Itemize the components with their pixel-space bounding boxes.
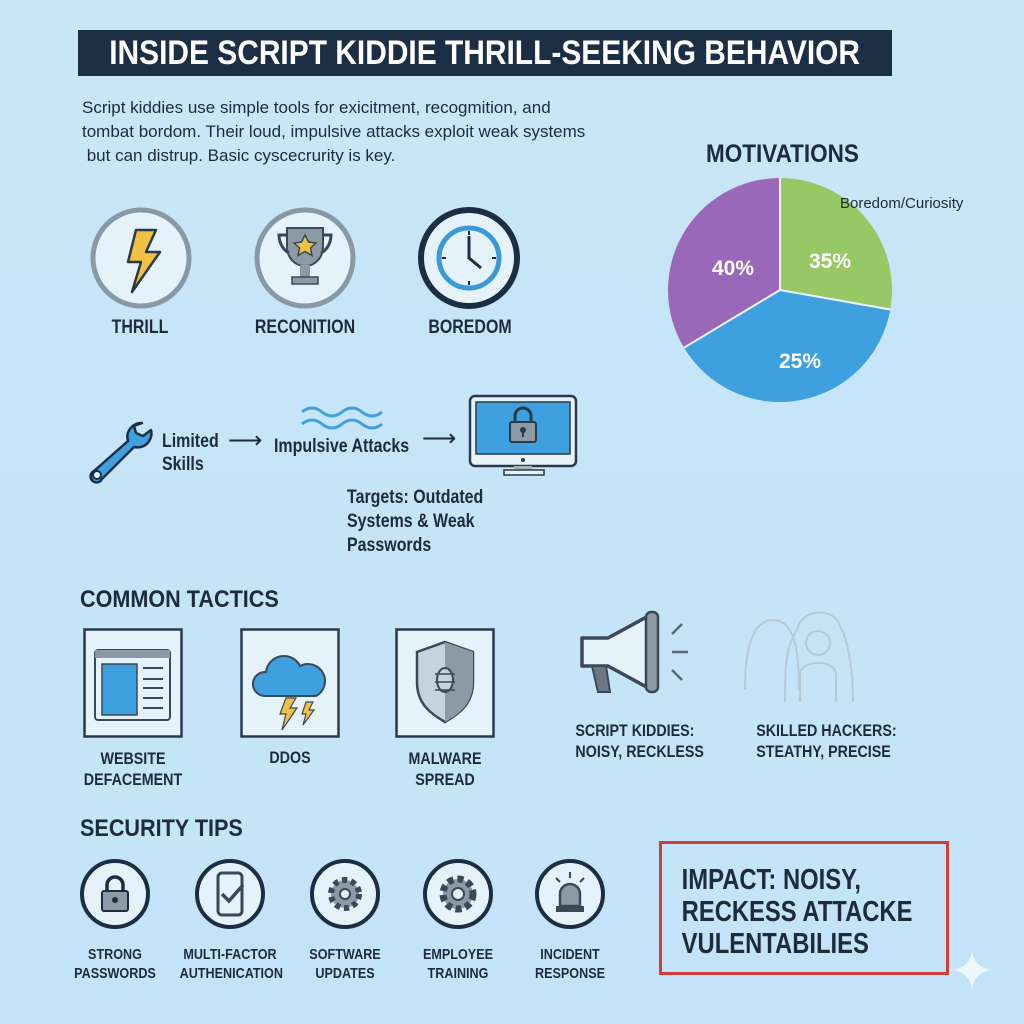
icon: hooded hackers: [744, 612, 854, 702]
label: malware: MALWARE: [408, 749, 481, 768]
intro text: but can distrup. Basic cyscecrurity is key.: [87, 146, 395, 165]
label: skilled hackers: SKILLED HACKERS:: [756, 721, 897, 740]
arrow: ⟶: [228, 427, 262, 454]
icon: software gear: [310, 859, 380, 929]
icon: wrench: [89, 422, 153, 484]
security tips icons: UPDATES: [315, 965, 375, 982]
tactics panels: [83, 628, 495, 789]
security tips icons: RESPONSE: [535, 965, 605, 982]
callout: impact: RECKESS ATTACKE: [682, 896, 912, 928]
text: targets: Passwords: [347, 535, 431, 556]
callout: impact: VULENTABILIES: [682, 928, 869, 960]
panel: defacement: [83, 628, 183, 738]
label: malware: [408, 749, 481, 789]
security tips icons: MULTI-FACTOR: [183, 946, 277, 963]
label: skilled hackers: STEATHY, PRECISE: [756, 742, 891, 761]
text: targets: Targets: Outdated: [347, 487, 483, 508]
security tips heading: SECURITY TIPS: [80, 815, 243, 842]
label: boredom: BOREDOM: [428, 317, 512, 338]
icon: megaphone: [580, 610, 688, 694]
icon: monitor lock: [468, 394, 578, 476]
pie chart: 25%: [779, 350, 821, 373]
title: INSIDE SCRIPT KIDDIE THRILL-SEEKING BEHAVIOR: [110, 34, 860, 72]
pie chart: 40%: [712, 257, 754, 280]
text: impulsive attacks: Impulsive Attacks: [274, 436, 409, 457]
icon: lock: [80, 859, 150, 929]
label: script kiddies: NOISY, RECKLESS: [575, 742, 704, 761]
pie chart: [668, 178, 964, 402]
label: skilled hackers: [756, 721, 897, 761]
motivations heading: MOTIVATIONS: [706, 140, 859, 168]
label: defacement: DEFACEMENT: [84, 770, 182, 789]
icon: thrill: [90, 208, 192, 308]
icon: mfa phone: [195, 859, 265, 929]
icon: trophy: [254, 208, 356, 308]
labels: [74, 946, 156, 982]
icon: training gear: [423, 859, 493, 929]
intro text: [82, 98, 585, 165]
label: defacement: WEBSITE: [100, 749, 166, 768]
label: defacement: [84, 749, 182, 789]
intro text: tombat bordom. Their loud, impulsive attacks exploit weak systems: [82, 122, 585, 141]
icon: sparkle: [952, 950, 992, 990]
security tips icons: SOFTWARE: [309, 946, 381, 963]
text: limited skills: [162, 431, 219, 475]
label: ddos: DDOS: [269, 748, 311, 767]
text: targets: [347, 487, 483, 556]
security tips icons: TRAINING: [428, 965, 488, 982]
callout: impact: IMPACT: NOISY,: [682, 864, 861, 896]
text: targets: Systems & Weak: [347, 511, 474, 532]
intro text: Script kiddies use simple tools for exicitment, recogmition, and: [82, 98, 551, 117]
icon: clock: [418, 207, 520, 309]
label: reconition: RECONITION: [255, 317, 355, 338]
security tips icons: [74, 859, 605, 982]
flow: limited skills to attacks: [89, 394, 578, 556]
security tips icons: EMPLOYEE: [423, 946, 493, 963]
labels: PASSWORDS: [74, 965, 156, 982]
panel: malware: [395, 628, 495, 738]
panel: ddos: [240, 628, 340, 738]
icon: alarm: [535, 859, 605, 929]
arrow: ⟶: [422, 425, 456, 452]
text: limited skills: Skills: [162, 454, 204, 475]
labels: STRONG: [88, 946, 142, 963]
text: limited skills: Limited: [162, 431, 219, 452]
label: thrill: THRILL: [112, 317, 168, 338]
callout: impact: [659, 841, 949, 975]
pie chart: Boredom/Curiosity: [840, 195, 964, 212]
icon: waves: [301, 406, 383, 430]
security tips icons: INCIDENT: [540, 946, 600, 963]
common tactics heading: COMMON TACTICS: [80, 586, 279, 613]
pie chart: 35%: [809, 250, 851, 273]
security tips icons: AUTHENICATION: [180, 965, 283, 982]
motivation icons: [90, 207, 520, 338]
comparison: script kiddies vs hackers: [575, 610, 897, 761]
label: script kiddies: [575, 721, 704, 761]
label: malware: SPREAD: [415, 770, 475, 789]
label: script kiddies: SCRIPT KIDDIES:: [575, 721, 694, 740]
